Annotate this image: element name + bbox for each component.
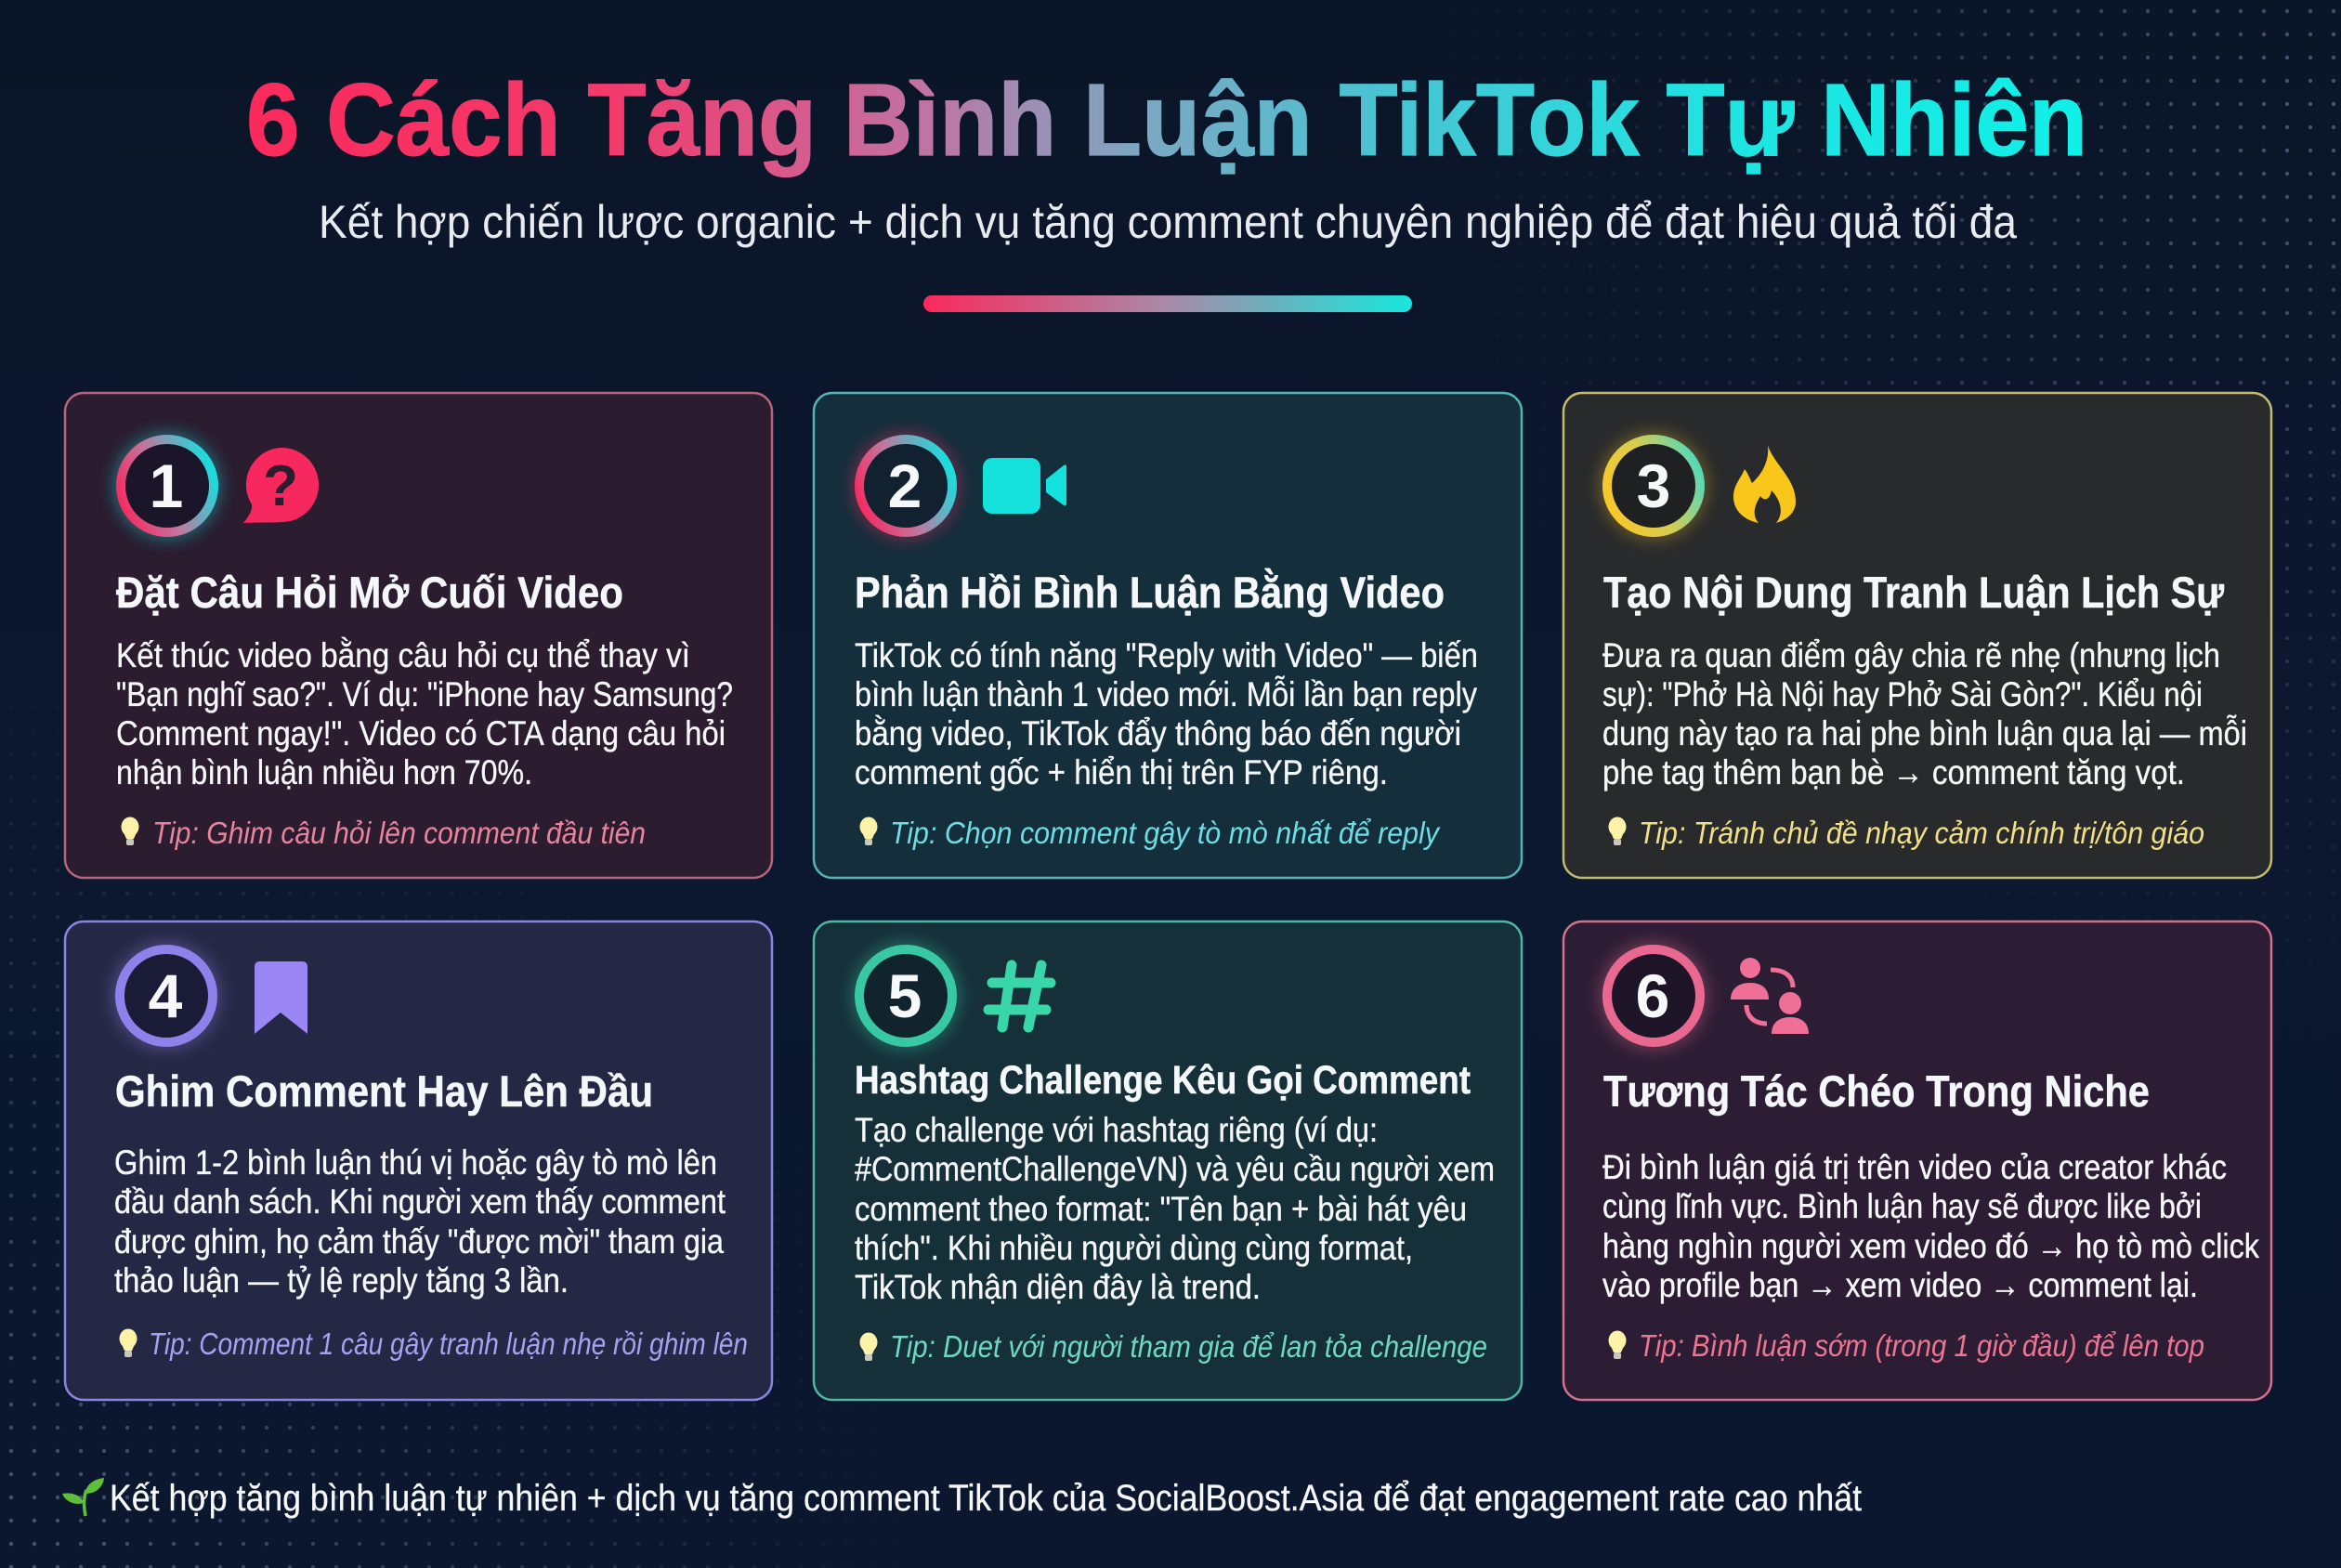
icon: question speech bubble	[243, 448, 319, 523]
panel: card 2	[814, 393, 1522, 878]
number badge 4: 4	[149, 961, 183, 1030]
card 3 body text: sự): "Phở Hà Nội hay Phở Sài Gòn?". Kiểu nội	[1602, 675, 2203, 713]
card 1 background	[65, 393, 772, 878]
card 1 body text: Comment ngay!". Video có CTA dạng câu hỏi	[116, 714, 726, 752]
card 1 heading: Đặt Câu Hỏi Mở Cuối Video	[116, 568, 623, 617]
card 2 body text	[855, 636, 1478, 791]
number badge 4	[120, 949, 213, 1042]
number badge 3	[1607, 439, 1700, 532]
card 1 body text: Kết thúc video bằng câu hỏi cụ thể thay vì	[116, 636, 690, 674]
number badge 6	[1607, 949, 1700, 1042]
title: 6 Cách Tăng Bình Luận TikTok Tự Nhiên	[246, 63, 2087, 177]
card 5 body text: #CommentChallengeVN) và yêu cầu người xem	[855, 1150, 1495, 1188]
icon: sprout	[62, 1478, 104, 1516]
footer callout	[62, 1478, 1862, 1519]
panel: card 1	[65, 393, 772, 878]
subtitle: Kết hợp chiến lược organic + dịch vụ tăng comment chuyên nghiệp để đạt hiệu quả tối đa	[319, 196, 2017, 248]
icon: people interacting	[1731, 958, 1809, 1034]
card 3 heading: Tạo Nội Dung Tranh Luận Lịch Sự	[1603, 568, 2225, 617]
card 5 tip: Tip: Duet với người tham gia để lan tỏa challenge	[890, 1329, 1487, 1364]
number badge 2: 2	[888, 451, 922, 520]
icon: video camera	[983, 458, 1066, 514]
panel: card 6	[1563, 921, 2271, 1400]
card 5 background	[814, 921, 1522, 1400]
card 4 background	[65, 921, 772, 1400]
panel: card 5	[814, 921, 1522, 1400]
card 2 tip: Tip: Chọn comment gây tò mò nhất để reply	[890, 816, 1441, 850]
icon: bookmark	[255, 961, 307, 1034]
number badge 1: 1	[150, 451, 183, 520]
card 2 body text: comment gốc + hiển thị trên FYP riêng.	[855, 753, 1388, 791]
card 3 body text: phe tag thêm bạn bè → comment tăng vọt.	[1602, 753, 2185, 791]
number badge 5	[859, 949, 952, 1042]
panel: card 4	[65, 921, 772, 1400]
card 5 body text: Tạo challenge với hashtag riêng (ví dụ:	[855, 1111, 1378, 1149]
card 5 heading: Hashtag Challenge Kêu Gọi Comment	[855, 1058, 1471, 1103]
number badge 2	[859, 439, 952, 532]
card 3 body text: dung này tạo ra hai phe bình luận qua lại — mỗi	[1602, 714, 2247, 752]
card 1 tip: Tip: Ghim câu hỏi lên comment đầu tiên	[152, 816, 646, 850]
card 4 body text: Ghim 1-2 bình luận thú vị hoặc gây tò mò lên	[114, 1143, 717, 1182]
card 2 body text: bằng video, TikTok đẩy thông báo đến người	[855, 714, 1461, 752]
card 2 body text: TikTok có tính năng "Reply with Video" — biến	[855, 636, 1478, 674]
icon: flame	[1733, 445, 1796, 523]
card 4 body text	[114, 1143, 726, 1300]
footer text: Kết hợp tăng bình luận tự nhiên + dịch vụ tăng comment TikTok của SocialBoost.Asia để đạt engagement rate cao nhất	[110, 1478, 1862, 1519]
card 6 body text: cùng lĩnh vực. Bình luận hay sẽ được like bởi	[1602, 1187, 2202, 1225]
card 4 tip: Tip: Comment 1 câu gây tranh luận nhẹ rồi ghim lên	[149, 1326, 748, 1361]
card 6 tip: Tip: Bình luận sớm (trong 1 giờ đầu) để lên top	[1639, 1328, 2204, 1363]
card 5 body text: TikTok nhận diện đây là trend.	[855, 1268, 1261, 1306]
card 5 body text: comment theo format: "Tên bạn + bài hát yêu	[855, 1190, 1467, 1228]
number badge 6: 6	[1636, 961, 1669, 1030]
icon: question speech bubble: ?	[263, 454, 298, 518]
card 6 body text: Đi bình luận giá trị trên video của creator khác	[1602, 1148, 2227, 1186]
icon: hashtag	[988, 965, 1051, 1027]
card 3 background	[1563, 393, 2271, 878]
card 2 body text: bình luận thành 1 video mới. Mỗi lần bạn reply	[855, 675, 1477, 713]
card 4 body text: được ghim, họ cảm thấy "được mời" tham gia	[114, 1222, 724, 1261]
card 1 body text: nhận bình luận nhiều hơn 70%.	[116, 753, 532, 791]
gradient divider bar	[923, 295, 1412, 312]
card 6 body text	[1602, 1148, 2259, 1304]
card 5 body text	[855, 1111, 1495, 1306]
card 6 body text: hàng nghìn người xem video đó → họ tò mò click	[1602, 1227, 2259, 1265]
card 2 heading: Phản Hồi Bình Luận Bằng Video	[855, 568, 1445, 617]
number badge 5: 5	[888, 961, 922, 1030]
card 6 background	[1563, 921, 2271, 1400]
card 5 body text: thích". Khi nhiều người dùng cùng format,	[855, 1229, 1413, 1267]
card 4 body text: thảo luận — tỷ lệ reply tăng 3 lần.	[114, 1261, 569, 1300]
card 3 body text	[1602, 636, 2247, 791]
panel: card 3	[1563, 393, 2271, 878]
card 4 heading: Ghim Comment Hay Lên Đầu	[115, 1066, 653, 1116]
card 3 body text: Đưa ra quan điểm gây chia rẽ nhẹ (nhưng lịch	[1602, 636, 2220, 674]
card 3 tip: Tip: Tránh chủ đề nhạy cảm chính trị/tôn giáo	[1639, 816, 2204, 850]
number badge 3: 3	[1637, 451, 1670, 520]
card 4 body text: đầu danh sách. Khi người xem thấy comment	[114, 1183, 726, 1221]
card 1 body text	[116, 636, 733, 791]
card 1 body text: "Bạn nghĩ sao?". Ví dụ: "iPhone hay Samsung?	[116, 675, 733, 713]
card 6 heading: Tương Tác Chéo Trong Niche	[1603, 1066, 2150, 1116]
card 2 background	[814, 393, 1522, 878]
number badge 1	[121, 439, 214, 532]
card 6 body text: vào profile bạn → xem video → comment lại.	[1602, 1266, 2198, 1304]
